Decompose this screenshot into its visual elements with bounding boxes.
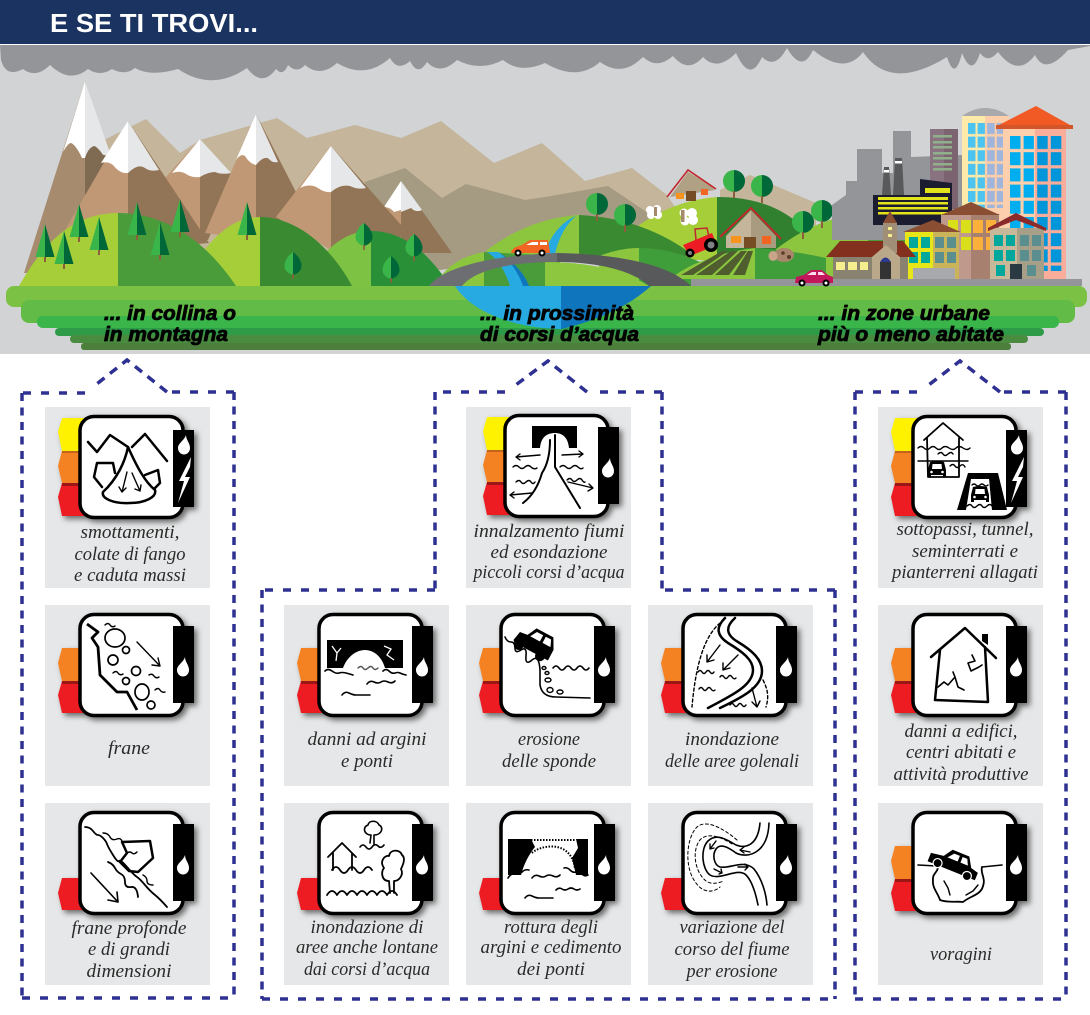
dashed outline: mountain group: [22, 360, 234, 998]
caption: voragini: [930, 945, 992, 965]
card: erosione delle sponde: [466, 605, 631, 786]
farmland hills: [434, 197, 932, 286]
tower blocks: [962, 106, 1073, 279]
caption: danni ad argini: [308, 730, 426, 750]
card: danni a edifici: [878, 605, 1043, 786]
caption: argini e cedimento: [480, 938, 622, 958]
caption: smottamenti,: [80, 523, 180, 543]
card: frane profonde: [45, 803, 210, 985]
icon: landslide and mud flow: [58, 416, 194, 518]
hills: [19, 213, 450, 286]
icon: damaged embankment and bridge: [297, 614, 433, 716]
label: near waterways: di corsi d’acqua: [480, 324, 639, 346]
mountains: [24, 81, 452, 273]
icon: landslide rocks: [58, 614, 194, 716]
caption: attività produttive: [894, 765, 1028, 785]
tractor: [683, 228, 718, 258]
caption: frane profonde: [72, 919, 186, 939]
ploughed field: [681, 251, 753, 275]
header bar: [0, 0, 1090, 44]
storm clouds: [0, 45, 1090, 80]
city skyline: [832, 129, 962, 240]
caption: dei ponti: [517, 960, 585, 980]
caption: sottopassi, tunnel,: [896, 520, 1034, 540]
icon: broken embankment and bridge: [479, 812, 615, 914]
caption: danni a edifici,: [904, 722, 1018, 742]
caption: per erosione: [685, 962, 778, 982]
card: rottura argini: [466, 803, 631, 985]
ground stripes: [6, 286, 1087, 350]
card: inondazione aree golenali: [648, 605, 813, 786]
label: near waterways: ... in prossimità: [480, 303, 634, 325]
icon: bank erosion with falling car: [479, 614, 615, 716]
caption: rottura degli: [504, 918, 598, 938]
caption: seminterrati e: [912, 542, 1018, 562]
label: hills and mountains: in montagna: [104, 324, 228, 346]
pink car: [795, 270, 833, 286]
church: [826, 211, 916, 279]
dashed outline: urban group: [855, 361, 1068, 999]
caption: ed esondazione: [490, 543, 608, 563]
caption: e di grandi: [88, 940, 170, 960]
icon: flooded underpass and basement: [891, 416, 1027, 518]
card: voragini: [878, 803, 1043, 985]
sheep: [646, 205, 698, 226]
icon: sinkhole with car: [891, 812, 1027, 914]
card: sottopassi: [878, 407, 1043, 588]
icon: flooded house and trees: [297, 812, 433, 914]
caption: corso del fiume: [674, 940, 790, 960]
label: urban areas: ... in zone urbane: [818, 303, 990, 325]
caption: centri abitati e: [906, 743, 1016, 763]
caption: pianterreni allagati: [890, 563, 1038, 583]
card: danni ad argini: [284, 605, 449, 786]
panel: landscape: [0, 45, 1090, 354]
trees: [36, 199, 422, 283]
caption: innalzamento fiumi: [474, 522, 624, 542]
orange car: [511, 240, 550, 256]
farmhouses: [667, 170, 781, 248]
caption: dimensioni: [86, 962, 172, 982]
round trees: [586, 170, 833, 239]
caption: delle aree golenali: [665, 752, 799, 772]
label: hills and mountains: ... in collina o: [104, 303, 236, 325]
icon: meander change: [661, 812, 797, 914]
caption: variazione del: [680, 918, 784, 938]
bridge: [429, 253, 691, 286]
caption: e caduta massi: [74, 566, 186, 586]
dashed outline: waterways group: [262, 361, 835, 999]
distant mountains: [100, 118, 816, 270]
cow: [768, 248, 794, 262]
caption: e ponti: [341, 752, 393, 772]
card: smottamenti: [45, 407, 210, 588]
icon: rising river: [483, 416, 619, 516]
label: urban areas: più o meno abitate: [817, 324, 1004, 346]
card: frane: [45, 605, 210, 786]
caption: frane: [108, 739, 150, 759]
caption: inondazione di: [310, 918, 424, 938]
caption: dai corsi d’acqua: [304, 960, 430, 980]
road: [691, 279, 1082, 286]
caption: colate di fango: [74, 545, 186, 565]
icon: floodplain inundation: [661, 614, 797, 716]
caption: piccoli corsi d’acqua: [472, 563, 624, 583]
river and lake: [455, 216, 651, 329]
factory: [873, 158, 952, 225]
town houses: [903, 202, 1046, 279]
card: variazione del corso: [648, 803, 813, 985]
icon: deep landslide: [58, 812, 194, 914]
caption: delle sponde: [502, 752, 596, 772]
icon: cracked house: [891, 614, 1027, 716]
caption: inondazione: [685, 730, 779, 750]
caption: aree anche lontane: [296, 938, 438, 958]
title: E SE TI TROVI...: [50, 8, 258, 38]
card: inondazione aree lontane: [284, 803, 449, 985]
card: innalzamento fiumi: [466, 407, 631, 588]
caption: erosione: [518, 730, 580, 750]
